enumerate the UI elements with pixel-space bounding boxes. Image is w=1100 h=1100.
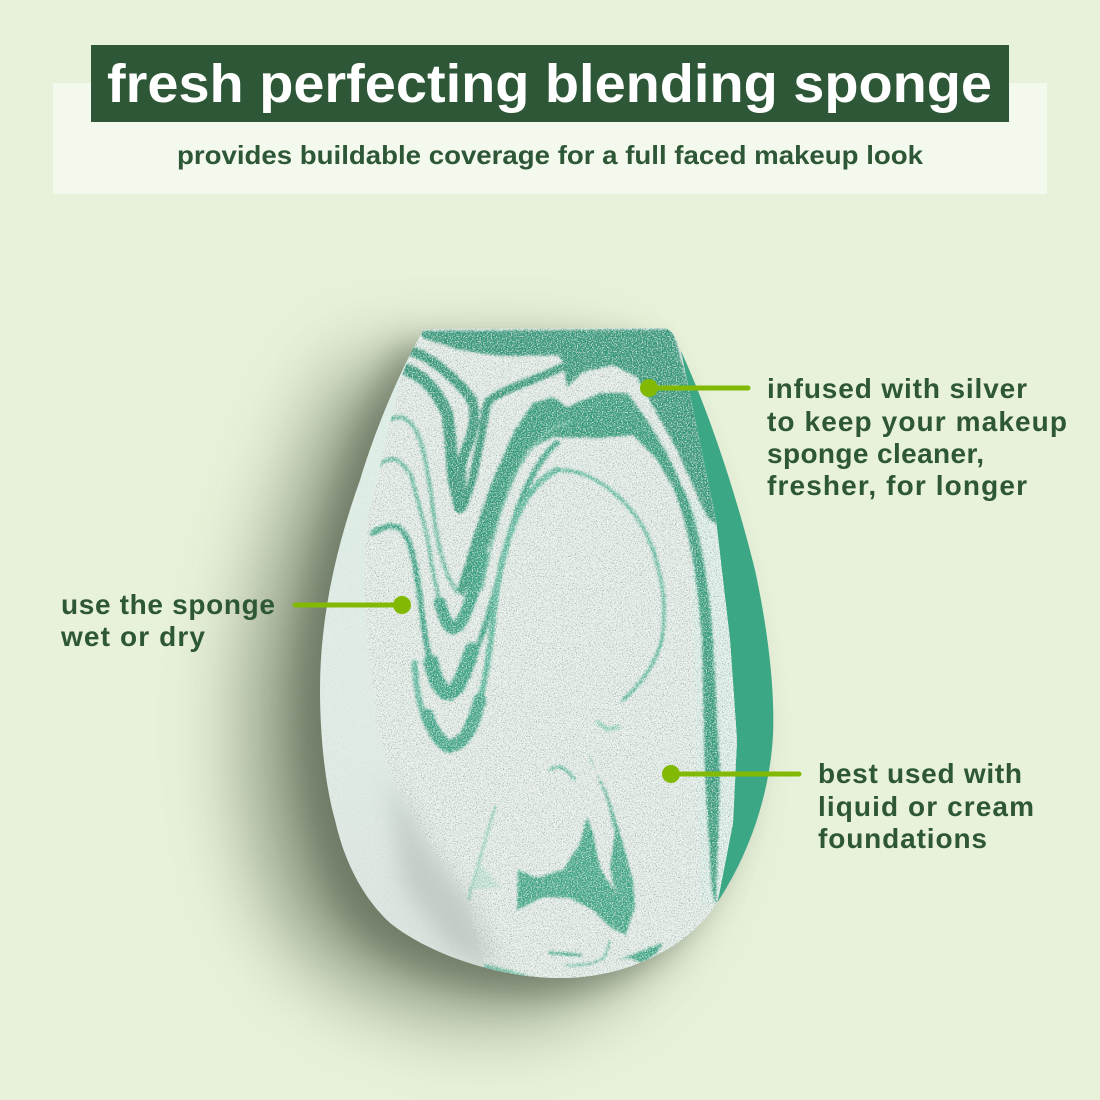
face base	[410, 328, 737, 978]
bevel mild texture	[320, 360, 482, 966]
callout: silver	[640, 373, 1067, 501]
main arch swirl	[457, 393, 720, 905]
text: silver: to keep your makeup	[767, 406, 1067, 437]
top dark band	[420, 329, 718, 525]
text: wet or dry: wet or dry	[60, 621, 205, 652]
second U swirl	[440, 555, 482, 628]
lower bevel shading	[388, 775, 500, 972]
bottom left mark	[483, 962, 534, 976]
text: silver	[767, 373, 1067, 501]
bottom swirl right arm	[587, 753, 635, 937]
sponge speckle texture	[364, 328, 737, 978]
bottom swirl	[517, 817, 625, 935]
inner long arc	[557, 470, 664, 700]
header panel	[53, 45, 1047, 194]
leader: wet or dry	[295, 596, 411, 614]
text: silver: infused with silver	[767, 373, 1027, 404]
text: foundations: liquid or cream	[818, 791, 1034, 822]
sponge illustration	[310, 320, 790, 990]
text: foundations: best used with	[818, 758, 1022, 789]
callout: foundations	[662, 758, 1034, 854]
subtitle: provides buildable coverage for a full faced makeup look	[177, 140, 924, 170]
rough edged swirl marks	[373, 329, 720, 978]
bottom right mark	[618, 943, 663, 963]
text: silver: fresher, for longer	[767, 470, 1027, 501]
sponge green side band	[662, 328, 774, 902]
fourth U swirl	[415, 470, 664, 750]
pale strip beside the side band	[712, 500, 736, 902]
leader: foundations	[662, 765, 799, 783]
thin light stripes	[380, 414, 572, 600]
leader: silver	[640, 379, 748, 397]
faint bottom marks	[468, 722, 618, 965]
upper V stripes	[407, 352, 563, 507]
text: silver: sponge cleaner,	[767, 438, 984, 469]
faint lower left wisp	[470, 863, 500, 890]
text: foundations	[818, 758, 1034, 854]
title banner: fresh perfecting blending sponge	[107, 54, 992, 114]
third U swirl	[373, 443, 557, 693]
sponge front face with swirls	[364, 328, 737, 978]
text: wet or dry	[60, 589, 275, 652]
text: foundations: foundations	[818, 823, 987, 854]
text: wet or dry: use the sponge	[61, 589, 275, 620]
callout: wet or dry	[60, 589, 411, 652]
sponge cast shadow	[248, 344, 749, 1016]
sponge base bevel	[320, 328, 737, 978]
